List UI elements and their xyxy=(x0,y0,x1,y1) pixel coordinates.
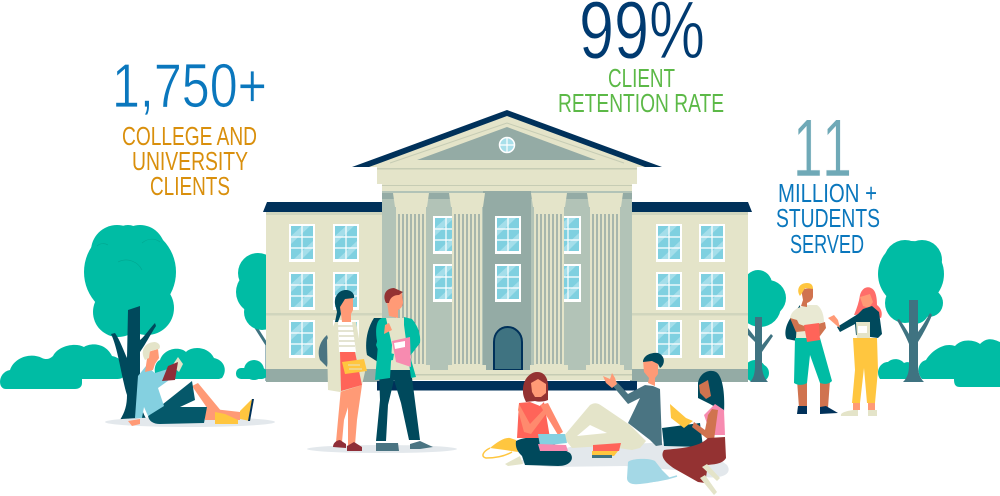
cardigan xyxy=(327,322,365,392)
backpack xyxy=(366,318,384,362)
stat: client count xyxy=(112,52,267,201)
book xyxy=(670,404,693,428)
hand xyxy=(828,315,840,328)
label: UNIVERSITY xyxy=(132,146,248,176)
label: SERVED xyxy=(790,229,864,259)
shorts xyxy=(794,338,832,385)
books xyxy=(342,359,367,374)
hair xyxy=(854,287,882,318)
stat: retention xyxy=(558,0,724,118)
notebook xyxy=(392,337,411,367)
shoes xyxy=(333,440,362,451)
floor book stack xyxy=(592,443,621,458)
arms xyxy=(518,403,563,435)
stat: students served xyxy=(776,101,880,259)
college building xyxy=(263,110,752,390)
label: STUDENTS xyxy=(776,203,880,233)
backpack xyxy=(319,335,330,367)
crown xyxy=(84,225,176,337)
seated man xyxy=(563,353,664,450)
foot xyxy=(505,456,523,466)
standing woman with books xyxy=(319,290,367,451)
bushes xyxy=(878,339,1000,387)
trousers xyxy=(516,437,572,466)
top xyxy=(517,402,550,438)
head xyxy=(643,360,658,386)
legs xyxy=(797,380,830,408)
seated group xyxy=(483,353,726,495)
yellow bag xyxy=(483,438,518,458)
label: CLIENTS xyxy=(150,171,230,201)
label xyxy=(122,121,257,201)
shirt xyxy=(790,305,824,338)
jacket xyxy=(375,317,420,380)
legs xyxy=(336,385,362,445)
sweater xyxy=(612,381,662,446)
bushes xyxy=(0,344,225,389)
arms xyxy=(790,318,826,336)
label: COLLEGE AND xyxy=(122,121,257,151)
head xyxy=(801,288,813,307)
face xyxy=(531,379,546,397)
trousers xyxy=(662,437,726,483)
label: RETENTION RATE xyxy=(558,88,724,118)
central block xyxy=(382,188,632,370)
skirt xyxy=(340,352,362,391)
right wing xyxy=(630,202,752,382)
label xyxy=(558,63,724,118)
face and neck xyxy=(338,298,353,322)
trousers xyxy=(563,403,646,450)
hair xyxy=(143,342,160,360)
hair xyxy=(798,283,813,296)
face xyxy=(699,380,711,399)
top xyxy=(704,404,725,435)
number: 11 xyxy=(793,101,852,194)
standing man with notebook xyxy=(366,288,433,451)
person with notebook at right xyxy=(828,287,882,416)
shoes xyxy=(376,441,433,451)
book xyxy=(804,323,820,342)
columns xyxy=(392,193,624,370)
striped top xyxy=(338,322,356,352)
tree behind left wing xyxy=(236,253,280,381)
hair xyxy=(384,288,403,303)
books xyxy=(538,434,568,451)
person reading under the tree xyxy=(128,342,254,426)
feet xyxy=(700,464,720,495)
head xyxy=(386,293,403,318)
torso xyxy=(135,366,172,418)
trousers xyxy=(852,338,878,403)
dark leg behind xyxy=(662,423,703,447)
hand xyxy=(128,419,140,426)
legs xyxy=(192,383,222,418)
shoes xyxy=(215,412,238,424)
notebook xyxy=(856,322,870,340)
trousers xyxy=(376,370,420,441)
head xyxy=(145,349,159,372)
seated woman with book xyxy=(662,371,726,495)
face xyxy=(860,294,873,308)
shoes xyxy=(797,406,838,414)
arm xyxy=(692,409,718,440)
hand xyxy=(384,323,392,334)
trunk xyxy=(897,300,932,382)
entablature xyxy=(377,167,637,191)
trousers xyxy=(148,381,207,424)
label: MILLION + xyxy=(778,178,877,208)
backpack xyxy=(785,305,801,341)
pediment xyxy=(352,110,662,167)
door xyxy=(494,327,522,370)
sweater xyxy=(837,306,882,338)
trunk xyxy=(111,306,156,420)
ankles xyxy=(853,403,875,410)
hand xyxy=(603,373,617,388)
ground shadows xyxy=(105,417,729,477)
hair xyxy=(335,290,354,322)
label xyxy=(776,178,880,259)
big left tree and bushes xyxy=(0,225,225,420)
tree behind right wing xyxy=(739,270,786,382)
book xyxy=(162,357,183,381)
number: 1,750+ xyxy=(112,52,267,121)
blue backpack xyxy=(627,459,677,484)
steps and foundation xyxy=(377,370,637,390)
hair xyxy=(643,353,664,368)
seated woman in coral xyxy=(505,372,572,466)
left wing xyxy=(263,202,384,382)
shoes xyxy=(841,410,877,416)
hair xyxy=(523,372,548,402)
hair xyxy=(698,371,724,412)
crown xyxy=(878,240,944,324)
right tree and bushes xyxy=(878,240,1000,387)
person with backpack at right xyxy=(785,283,838,414)
shirt xyxy=(386,318,412,370)
label: CLIENT xyxy=(608,63,675,93)
